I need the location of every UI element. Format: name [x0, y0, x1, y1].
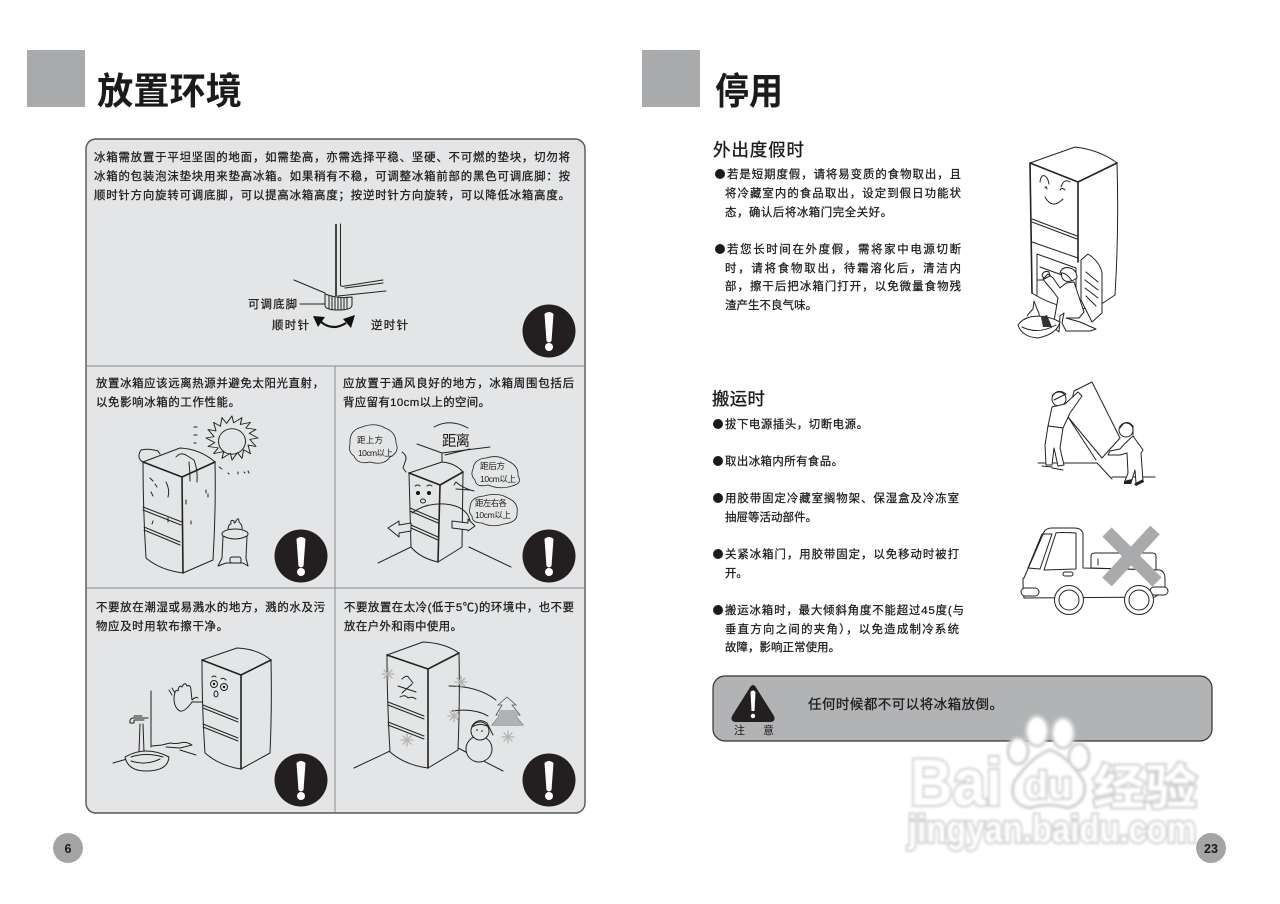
text block: holiday instructions: 态，确认后将冰箱门完全关好。: [725, 205, 892, 219]
text block: damp: [96, 600, 325, 633]
title block: out of use: [642, 50, 783, 115]
icon: sun: [206, 416, 258, 460]
illustration: fridge melting in the sun: [139, 416, 258, 573]
illustration: two people carrying fridge: [1038, 382, 1155, 486]
watermark: Baidu jingyan: jingyan.baidu.com: [907, 809, 1196, 851]
callout: clearance behind: [472, 457, 520, 488]
icon: warning 3: [522, 530, 576, 582]
icon: snowflakes: [382, 668, 514, 746]
callout: clearance left and right: 10cm以上: [475, 510, 511, 520]
text block: moving instructions: 开。: [725, 568, 748, 580]
icon: warning 2: [274, 530, 328, 582]
title block: placement environment: 放置环境: [97, 61, 242, 115]
heading: holiday: 外出度假时: [713, 140, 804, 160]
callout: clearance above: [350, 425, 397, 463]
text block: holiday instructions: 将冷藏室内的食品取出，设定到假日功能状: [725, 186, 962, 200]
illustration: fridge in cold: [354, 642, 523, 771]
title block: placement environment: [27, 50, 242, 115]
arrow: right: [452, 519, 475, 531]
text block: moving instructions: [713, 417, 964, 654]
illustration: clearance around fridge: [350, 423, 520, 567]
callout: clearance behind: 10cm以上: [480, 474, 516, 484]
diagram: adjustable foot: 顺时针: [272, 318, 309, 332]
text block: moving instructions: 取出冰箱内所有食品。: [725, 454, 843, 468]
text block: heat and sun: 以免影响冰箱的工作性能。: [96, 395, 240, 409]
text block: holiday instructions: 部，擦干后把冰箱门打开，以免微量食物残: [725, 279, 961, 293]
callout: clearance left and right: [469, 494, 517, 526]
text block: intro: 顺时针方向旋转可调底脚，可以提高冰箱高度；按逆时针方向旋转，可以降低冰箱高度。: [94, 188, 570, 202]
icon: tree: [492, 697, 523, 725]
arrow: left: [388, 521, 411, 537]
text block: cold: 不要放置在太冷(低于5℃)的环境中，也不要: [344, 600, 574, 614]
text block: moving instructions: 用胶带固定冷藏室搁物架、保湿盒及冷冻室: [725, 491, 959, 505]
icon: warning 1: [522, 304, 576, 358]
icon: caution triangle: [731, 685, 775, 722]
heading: moving: 搬运时: [712, 389, 765, 409]
illustration: fridge near water: [113, 648, 271, 771]
illustration: truck with fridge laid down, crossed out: [1021, 528, 1168, 614]
text block: heat and sun: 放置冰箱应该远离热源并避免太阳光直射，: [96, 376, 324, 390]
page number 23: 23: [1204, 842, 1218, 856]
text block: ventilation: 背应留有10cm以上的空间。: [343, 395, 490, 409]
watermark: Baidu jingyan: du: [1024, 765, 1072, 807]
diagram: adjustable foot: 可调底脚: [248, 297, 297, 311]
callout: caution bar: [713, 676, 1212, 741]
text block: moving instructions: 关紧冰箱门，用胶带固定，以免移动时被打: [725, 547, 959, 561]
text block: holiday instructions: [715, 167, 962, 312]
page number 6: 6: [65, 842, 72, 856]
diagram: adjustable foot: 逆时针: [371, 318, 408, 332]
icon: fire stove: [218, 519, 248, 566]
page number 23: [1196, 833, 1226, 863]
text block: ventilation: [343, 376, 574, 409]
icon: kneeling person: [1042, 268, 1096, 332]
text block: intro: 冰箱需放置于平坦坚固的地面，如需垫高，亦需选择平稳、坚硬、不可燃的垫块，切勿将: [94, 150, 570, 164]
text block: holiday instructions: 时，请将食物取出，待霜溶化后，清洁内: [725, 261, 961, 275]
watermark: Baidu jingyan: 经验: [1093, 762, 1197, 815]
icon: right mover: [1108, 422, 1144, 486]
callout: clearance above: 10cm以上: [358, 448, 393, 458]
callout: clearance above: 距上方: [357, 435, 383, 445]
text block: damp: 不要放在潮湿或易溅水的地方，溅的水及污: [96, 600, 325, 614]
panel: placement instructions: [86, 139, 585, 813]
callout: clearance left and right: 距左右各: [475, 498, 507, 508]
watermark: Baidu jingyan: Bai: [910, 745, 1002, 819]
text block: damp: 物应及时用软布擦干净。: [96, 619, 228, 633]
diagram: adjustable foot: [248, 224, 408, 332]
text block: holiday instructions: 渣产生不良气味。: [725, 298, 817, 312]
title block: out of use: 停用: [715, 61, 783, 115]
text block: moving instructions: 垂直方向之间的夹角），以免造成制冷系统: [725, 622, 959, 636]
watermark: Baidu jingyan: [907, 716, 1197, 851]
icon: open freezer door: [1081, 254, 1102, 322]
text block: moving instructions: 抽屉等活动部件。: [725, 510, 817, 524]
text block: heat and sun: [96, 376, 324, 409]
text block: intro: 冰箱的包装泡沫垫块用来垫高冰箱。如果稍有不稳，可调整冰箱前部的黑色可调底脚：按: [94, 169, 570, 183]
illustration: smiling fridge with person cleaning: [1018, 147, 1118, 338]
text block: intro: [94, 150, 570, 202]
illustration: clearance around fridge: 距离: [442, 433, 470, 450]
text block: moving instructions: 故障，影响正常使用。: [725, 640, 840, 654]
callout: caution bar: 意: [763, 723, 774, 737]
text block: moving instructions: 拔下电源插头，切断电源。: [725, 417, 868, 431]
callout: caution bar: 任何时候都不可以将冰箱放倒。: [808, 697, 1003, 712]
icon: warning 4: [274, 754, 328, 806]
icon: left mover: [1042, 391, 1082, 470]
icon: snowman: [466, 721, 493, 762]
text block: cold: 放在户外和雨中使用。: [344, 619, 462, 633]
text block: holiday instructions: 若您长时间在外度假，需将家中电源切断: [727, 242, 961, 256]
text block: ventilation: 应放置于通风良好的地方，冰箱周围包括后: [343, 376, 574, 390]
text block: cold: [344, 600, 574, 633]
icon: warning 5: [522, 754, 576, 806]
text block: holiday instructions: 若是短期度假，请将易变质的食物取出，且: [727, 167, 961, 181]
icon: waving hand: [169, 684, 202, 711]
page number 6: [53, 833, 83, 863]
callout: caution bar: 注: [734, 723, 745, 737]
callout: clearance behind: 距后方: [480, 461, 505, 471]
icon: faucet and basin: [113, 716, 196, 771]
text block: moving instructions: 搬运冰箱时，最大倾斜角度不能超过45度(与: [725, 603, 964, 617]
icon: bowl of food: [1018, 301, 1060, 338]
